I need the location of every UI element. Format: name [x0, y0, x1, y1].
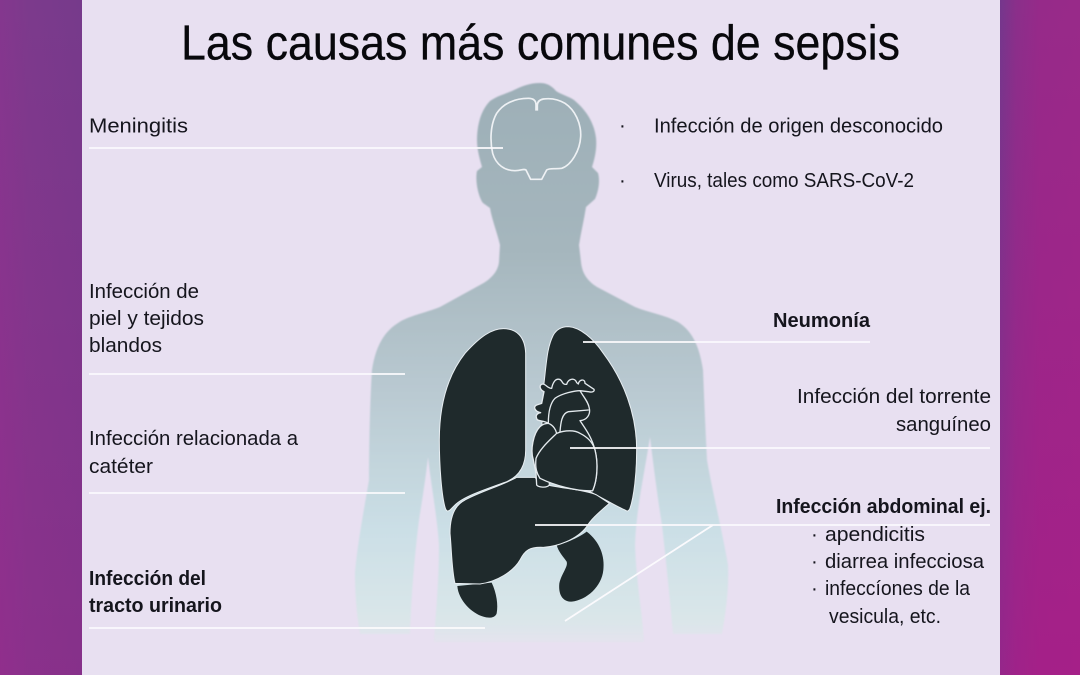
organs	[439, 327, 637, 618]
left magenta tint	[0, 0, 82, 675]
label: bloodstream: Infección del torrente	[797, 385, 991, 408]
label: viruses: ·	[619, 169, 626, 192]
label: abdominal: diarrea infecciosa	[825, 550, 985, 573]
label: urinary tract: tracto urinario	[89, 594, 222, 617]
label: skin and soft tissue: piel y tejidos	[89, 307, 204, 330]
label: skin and soft tissue: Infección de	[89, 280, 199, 303]
label: unknown origin: Infección de origen desconocido	[654, 114, 943, 138]
label: urinary tract: Infección del	[89, 567, 206, 590]
icon: small intestine	[457, 583, 497, 618]
label: bloodstream	[797, 385, 991, 436]
icon: liver	[450, 477, 609, 584]
icon: stomach	[557, 532, 604, 602]
icon: heart	[532, 379, 597, 491]
label: unknown origin: ·	[619, 114, 626, 137]
label: skin and soft tissue	[89, 280, 204, 357]
label: abdominal: infeccíones de la	[825, 577, 971, 600]
label: skin and soft tissue: blandos	[89, 334, 162, 357]
icon: right lung	[439, 329, 526, 511]
label: abdominal: apendicitis	[825, 523, 925, 546]
label: abdominal	[776, 495, 991, 628]
label: catheter: catéter	[89, 455, 153, 478]
right magenta tint	[1000, 0, 1080, 675]
label: bloodstream: sanguíneo	[896, 413, 991, 436]
label: abdominal: ·	[811, 577, 818, 600]
left background band	[0, 0, 82, 675]
icon: brain outline	[491, 98, 581, 179]
icon: left lung	[540, 327, 637, 511]
label: pneumonia: Neumonía	[773, 309, 871, 332]
title: Las causas más comunes de sepsis	[181, 16, 900, 70]
leader lines	[89, 148, 990, 628]
body silhouette	[355, 83, 728, 642]
label: abdominal: Infección abdominal ej.	[776, 495, 991, 518]
label: meningitis: Meningitis	[89, 114, 188, 138]
label: abdominal: vesicula, etc.	[829, 605, 941, 628]
label: abdominal: ·	[811, 523, 818, 546]
label: abdominal: ·	[811, 550, 818, 573]
label: catheter: Infección relacionada a	[89, 427, 299, 450]
label: viruses: Virus, tales como SARS-CoV-2	[654, 169, 914, 192]
right background band	[1000, 0, 1080, 675]
label: urinary tract	[89, 567, 222, 617]
label: catheter	[89, 427, 299, 478]
